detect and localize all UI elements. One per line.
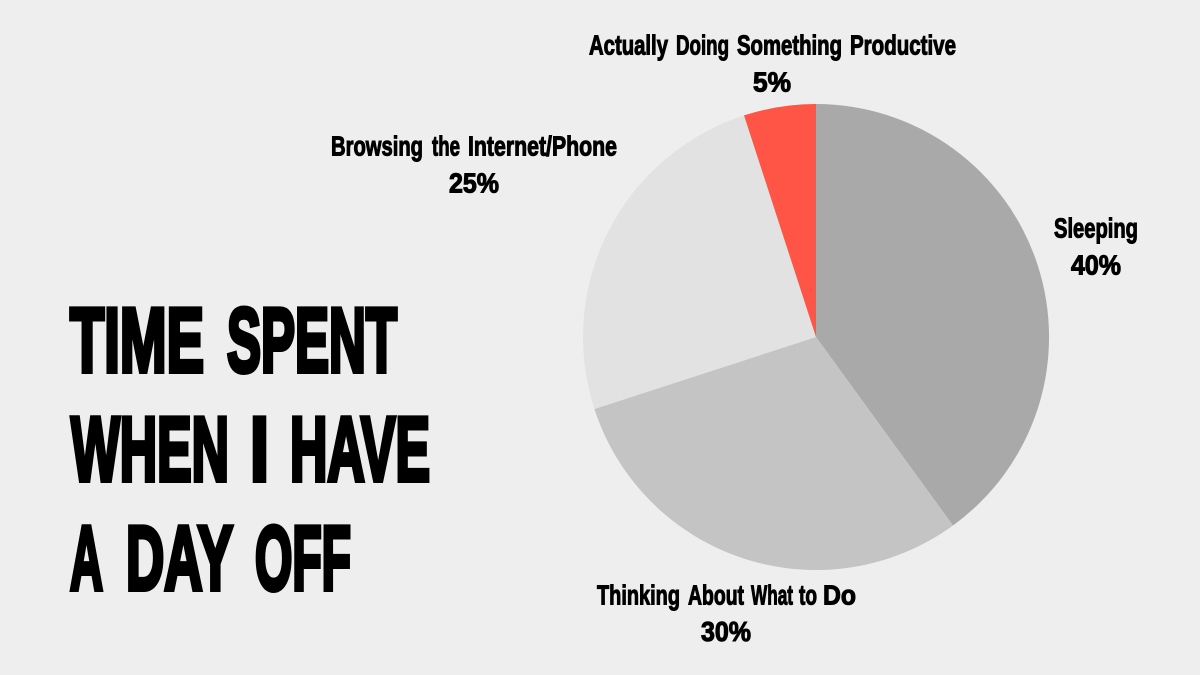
label: actually doing something productive: 5% bbox=[753, 66, 791, 98]
slice: sleeping 40% bbox=[816, 104, 1049, 526]
title: I bbox=[250, 400, 269, 500]
label: thinking about what to do: Do bbox=[823, 580, 856, 610]
label: thinking about what to do: Thinking bbox=[597, 580, 680, 610]
label: actually doing something productive: Productive bbox=[850, 30, 956, 60]
title bbox=[70, 290, 430, 610]
label: browsing the internet/phone: the bbox=[432, 130, 460, 162]
label: thinking about what to do: What bbox=[751, 580, 793, 610]
title: A bbox=[70, 508, 103, 610]
pie chart bbox=[583, 104, 1049, 570]
label: thinking about what to do bbox=[597, 580, 856, 647]
label: sleeping bbox=[1054, 212, 1138, 280]
title: OFF bbox=[255, 508, 351, 610]
slice: thinking about what to do 30% bbox=[594, 337, 953, 570]
label: actually doing something productive: Something bbox=[737, 30, 842, 60]
title: HAVE bbox=[290, 400, 430, 500]
label: thinking about what to do: About bbox=[688, 580, 744, 610]
title: TIME bbox=[70, 290, 204, 392]
label: sleeping: Sleeping bbox=[1054, 212, 1138, 244]
label: actually doing something productive bbox=[589, 30, 956, 98]
slice: browsing the internet/phone 25% bbox=[583, 115, 816, 409]
label: thinking about what to do: 30% bbox=[701, 616, 751, 647]
slice: actually doing something productive 5% bbox=[744, 104, 816, 337]
label: browsing the internet/phone: 25% bbox=[449, 168, 499, 198]
label: thinking about what to do: to bbox=[799, 580, 817, 610]
title: SPENT bbox=[227, 290, 397, 392]
title: WHEN bbox=[71, 400, 229, 500]
label: browsing the internet/phone: Browsing bbox=[331, 130, 423, 162]
label: actually doing something productive: Actually bbox=[589, 30, 668, 60]
label: browsing the internet/phone bbox=[331, 130, 617, 198]
label: browsing the internet/phone: Internet/Phone bbox=[468, 130, 617, 162]
label: actually doing something productive: Doing bbox=[676, 30, 729, 60]
title: DAY bbox=[126, 508, 233, 610]
label: sleeping: 40% bbox=[1071, 250, 1121, 280]
